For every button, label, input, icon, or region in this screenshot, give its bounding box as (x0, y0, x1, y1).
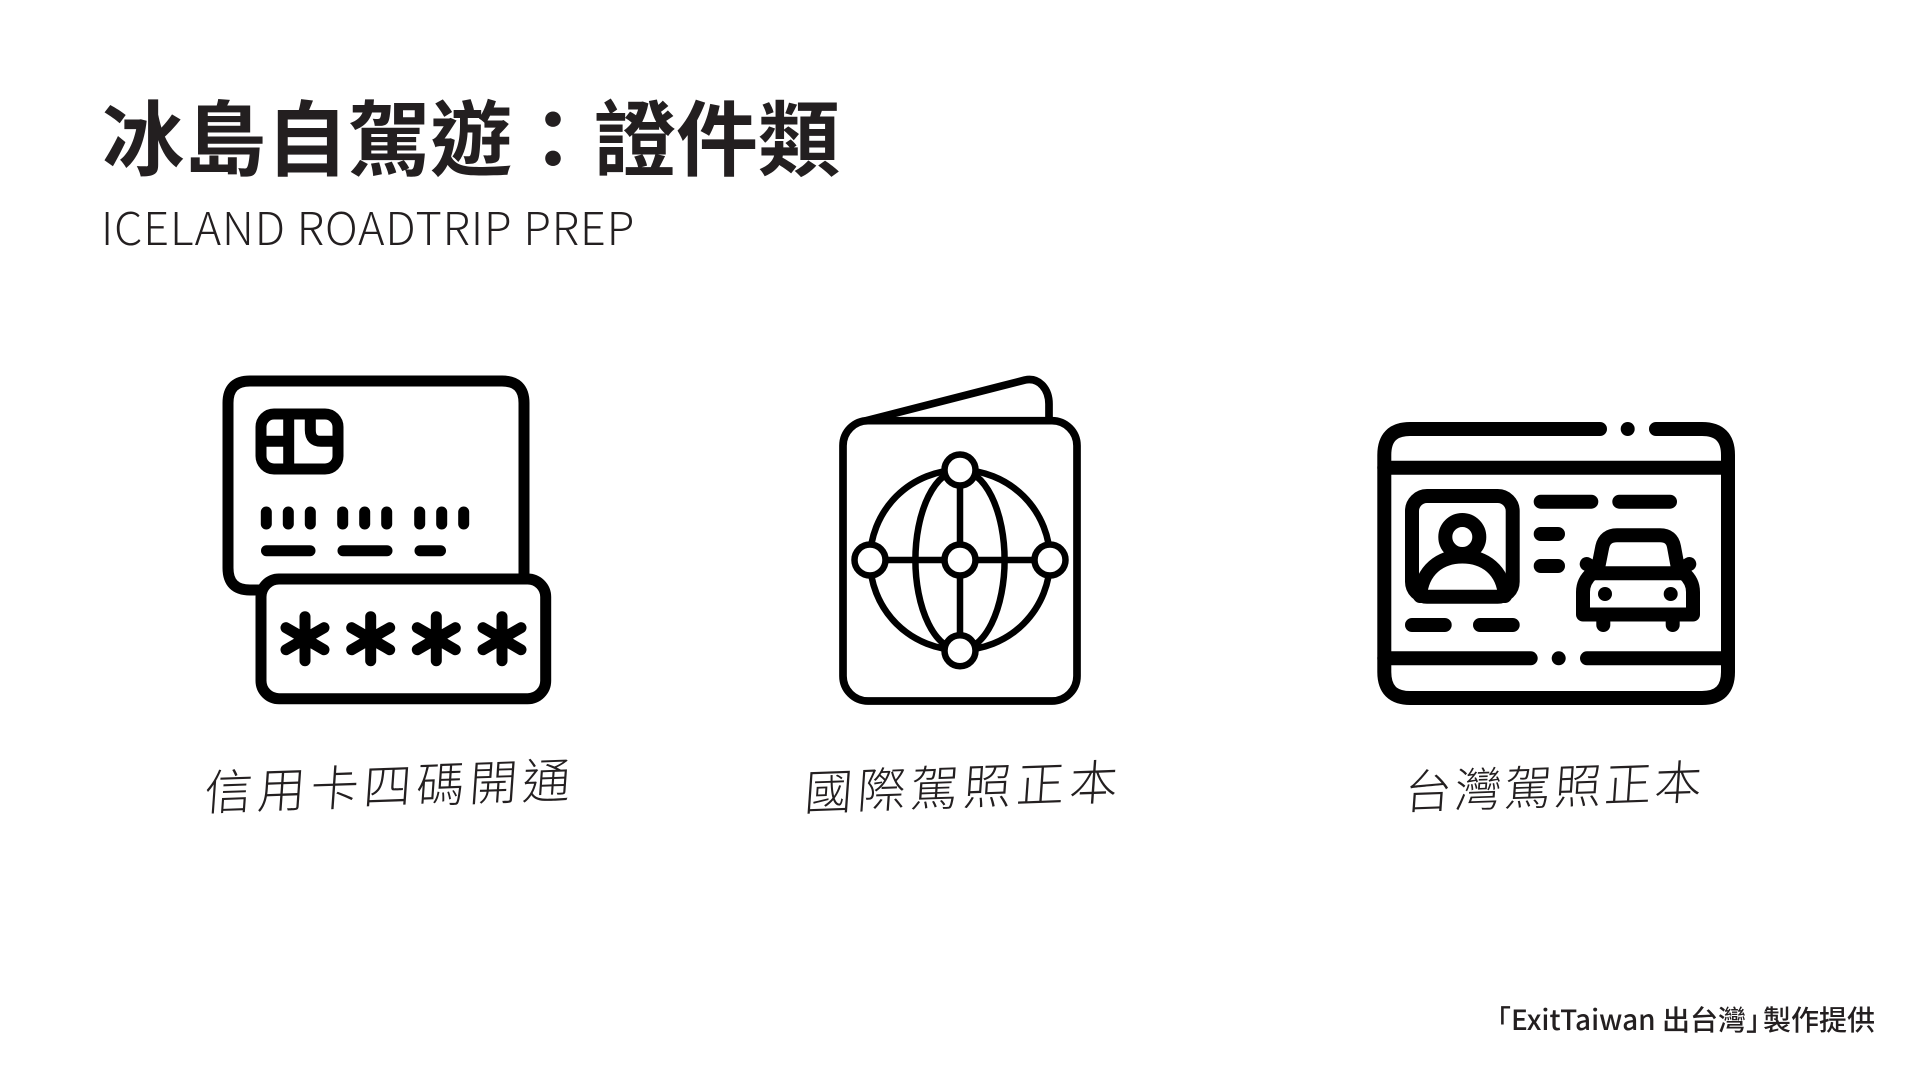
footer credit: 「ExitTaiwan 出台灣」製作提供 (1483, 999, 1875, 1039)
icon: international passport with globe (843, 380, 1077, 701)
icon: driver licence with car (1384, 422, 1728, 698)
title: 冰島自駕遊：證件類 (102, 74, 840, 193)
caption: Taiwan licence: 台灣駕照正本 (1403, 743, 1707, 823)
subtitle: ICELAND ROADTRIP PREP (101, 193, 635, 258)
caption: international licence: 國際駕照正本 (803, 743, 1125, 824)
icon: credit card with PIN (228, 381, 546, 699)
caption: credit card: 信用卡四碼開通 (203, 741, 578, 824)
